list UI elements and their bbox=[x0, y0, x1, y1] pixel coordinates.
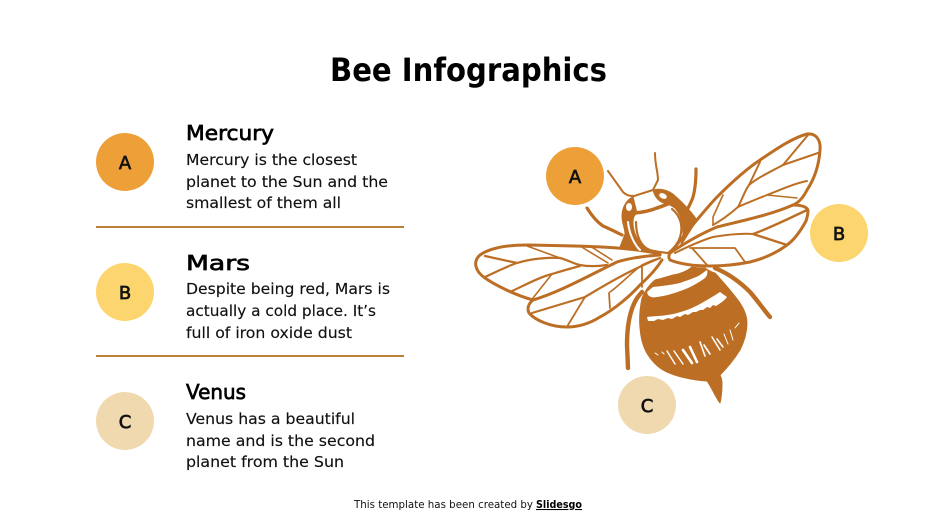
left hindwing bbox=[528, 258, 662, 327]
badge A bbox=[96, 133, 154, 191]
text block: Mercury description: Mercury is the closest bbox=[186, 151, 357, 169]
left forewing bbox=[476, 245, 660, 300]
right hindwing bbox=[669, 205, 808, 266]
text block: Venus description: Venus has a beautiful bbox=[186, 410, 355, 428]
footer credit: This template has been created by bbox=[353, 499, 533, 511]
badge B: B bbox=[119, 283, 131, 304]
text block: Mars description bbox=[186, 280, 390, 342]
text block: Mars description: full of iron oxide dust bbox=[186, 324, 352, 342]
panel: Venus bbox=[96, 380, 375, 471]
badge B bbox=[96, 263, 154, 321]
antennae bbox=[608, 153, 696, 214]
badge C: C bbox=[119, 412, 131, 433]
panel: Mercury bbox=[96, 121, 388, 212]
title: Bee Infographics bbox=[330, 51, 607, 89]
footer credit: Slidesgo bbox=[536, 499, 582, 511]
heading: Mars: Mars bbox=[186, 251, 250, 275]
abdomen legs bbox=[627, 268, 770, 368]
bee label B bbox=[810, 204, 868, 262]
badge C bbox=[96, 392, 154, 450]
text block: Mars description: actually a cold place. It’s bbox=[186, 302, 376, 320]
badge A: A bbox=[119, 153, 132, 174]
text block: Mercury description: smallest of them all bbox=[186, 194, 341, 212]
heading: Mercury: Mercury bbox=[186, 121, 274, 145]
head and thorax bbox=[620, 189, 697, 253]
text block: Mercury description: planet to the Sun and the bbox=[186, 173, 388, 191]
text block: Venus description bbox=[186, 410, 375, 471]
bee label C bbox=[618, 376, 676, 434]
text block: Mercury description bbox=[186, 151, 388, 212]
bee label A: A bbox=[569, 167, 582, 188]
abdomen bbox=[640, 267, 747, 403]
text block: Mars description: Despite being red, Mars is bbox=[186, 280, 390, 298]
text block: Venus description: planet from the Sun bbox=[186, 453, 344, 471]
panel: Mars bbox=[96, 251, 390, 342]
abdomen white bands bbox=[647, 270, 727, 321]
bee label A bbox=[546, 147, 604, 205]
heading: Venus: Venus bbox=[186, 380, 246, 404]
front leg bbox=[587, 208, 622, 235]
bee illustration bbox=[476, 134, 820, 403]
text block: Venus description: name and is the second bbox=[186, 432, 375, 450]
bee label B: B bbox=[833, 224, 845, 245]
bee label C: C bbox=[641, 396, 653, 417]
right forewing bbox=[670, 134, 820, 253]
abdomen hatching bbox=[655, 323, 739, 364]
